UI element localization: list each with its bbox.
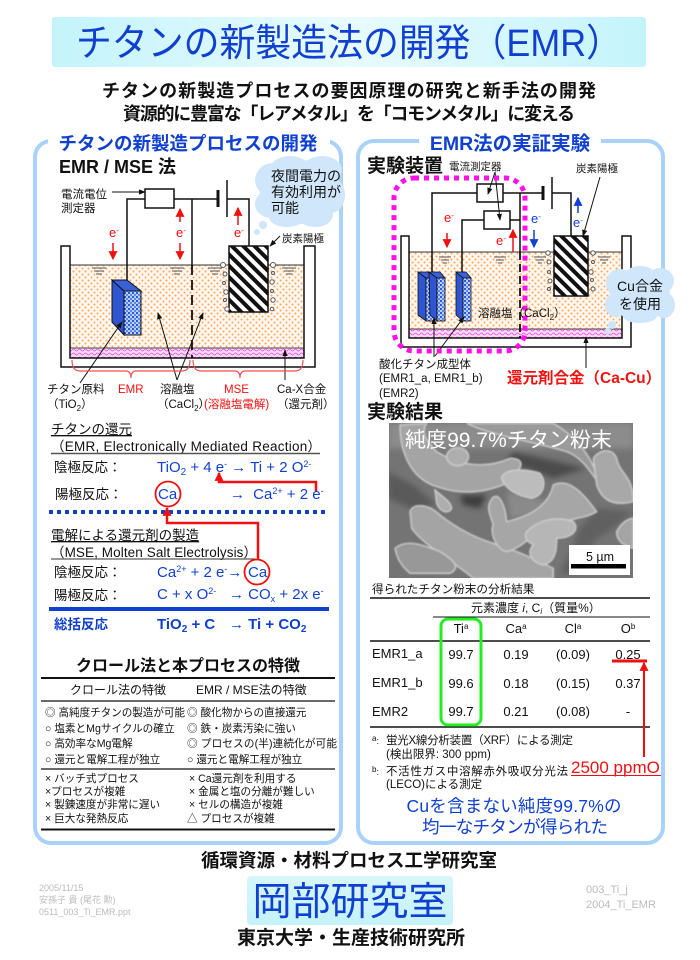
diagram labels: (溶融塩電解) — [204, 397, 269, 411]
table notes: : — [376, 736, 379, 746]
diagram labels: （TiO — [47, 399, 77, 411]
subtitle — [102, 81, 596, 124]
table notes — [372, 733, 574, 791]
table: titanium analysis: (0.09) — [556, 647, 590, 662]
table notes: b — [372, 765, 377, 774]
table: titanium analysis: 0.37 — [615, 676, 641, 691]
SEM title: 純度99.7%チタン粉末 — [405, 429, 612, 452]
table: titanium analysis — [370, 582, 650, 757]
TiO2 block — [112, 280, 141, 335]
text block: MSE reaction: - — [321, 586, 324, 596]
table: titanium analysis: 0.19 — [503, 647, 529, 662]
diagram: EMR experimental cell: - — [538, 212, 541, 221]
table: titanium analysis: （質量%） — [542, 600, 601, 615]
text block: MSE reaction: 2+ — [176, 564, 186, 574]
overall reaction: 2 — [301, 624, 307, 635]
table: comparison: × 金属と塩の分離が難しい — [189, 785, 315, 798]
diagram: EMR experimental cell: ） — [554, 307, 566, 320]
file info left: 0511_003_Ti_EMR.ppt — [39, 907, 131, 917]
callout: Cu alloy cloud: を使用 — [619, 296, 661, 312]
circle: Ca anode — [156, 482, 180, 506]
text block: EMR reaction: 陽極反応： — [55, 487, 122, 502]
diagram labels: MSE — [224, 384, 249, 396]
table: comparison: × バッチ式プロセス — [45, 772, 139, 785]
text block: MSE reaction: x — [271, 594, 276, 604]
file info left — [39, 883, 131, 917]
text block: MSE reaction: 陽極反応： — [54, 588, 122, 603]
overall reaction: → Ti + CO — [229, 616, 301, 633]
battery — [551, 177, 553, 209]
diagram labels: 2 — [77, 404, 82, 413]
text block: MSE reaction: + 2x e — [275, 586, 321, 603]
diagram labels — [47, 188, 334, 413]
table: comparison: × 巨大な発熱反応 — [45, 812, 129, 825]
diagram labels: チタン原料 — [47, 382, 105, 396]
table notes: a — [372, 734, 377, 743]
text block: MSE reaction — [51, 528, 324, 604]
electron labels: - — [116, 226, 119, 235]
table: comparison: ◎ 鉄・炭素汚染に強い — [187, 722, 296, 735]
table: comparison: ◎ 高純度チタンの製造が可能 — [45, 706, 185, 719]
text block: EMR reaction: 2+ — [272, 486, 283, 496]
text block: MSE reaction: → CO — [229, 586, 271, 603]
overall reaction: 2 — [182, 624, 188, 635]
braces — [72, 360, 303, 378]
table: comparison — [41, 678, 337, 830]
table: titanium analysis: EMR1_a — [372, 646, 423, 661]
text block: EMR reaction: → Ca — [230, 486, 272, 503]
file info left: 安孫子 貴 (尾花 勲) — [39, 894, 116, 905]
footer heading: 循環資源・材料プロセス工学研究室 — [201, 850, 497, 871]
text block: MSE reaction: （MSE, Molten Salt Electrolysis） — [51, 545, 257, 560]
diagram labels: EMR — [118, 384, 144, 396]
text block: EMR reaction: チタンの還元 — [51, 422, 132, 437]
carbon anode — [229, 246, 268, 312]
text block: EMR reaction: 陰極反応： — [54, 460, 122, 475]
text block: MSE reaction: 2- — [208, 586, 216, 596]
diagram: EMR experimental cell: e — [531, 211, 538, 226]
table: titanium analysis: (0.08) — [556, 704, 590, 719]
diagram labels: ） — [81, 398, 93, 411]
divider: dotted — [49, 510, 327, 514]
table: comparison: ○ 還元と電解工程が独立 — [187, 753, 303, 766]
table: titanium analysis: 元素濃度 i, C — [471, 601, 540, 615]
panel: right EMR demonstration — [358, 133, 663, 843]
table: titanium analysis: b — [631, 622, 636, 631]
table: titanium analysis: (0.15) — [556, 676, 590, 691]
table notes: (検出限界: 300 ppm) — [386, 747, 491, 761]
carbon anode — [554, 236, 588, 296]
table: comparison: EMR / MSE法の特徴 — [196, 682, 307, 697]
red arrow — [643, 663, 645, 757]
text block: EMR reaction — [51, 422, 324, 506]
text block: MSE reaction: + 2 e — [186, 564, 224, 581]
diagram labels: （還元剤） — [277, 398, 334, 411]
electron labels: e — [234, 225, 241, 240]
callout: Cu alloy cloud — [605, 266, 675, 334]
diagram labels: 2 — [194, 404, 199, 413]
scale bar: 5 µm — [586, 550, 614, 564]
electron labels: e — [444, 210, 451, 225]
overall reaction: 総括反応 — [54, 616, 108, 632]
table: comparison: ○ 塩素とMgサイクルの確立 — [45, 722, 175, 735]
conclusion: Cuを含まない純度99.7%の — [406, 796, 622, 816]
text block: MSE reaction: C + x O — [157, 586, 208, 603]
diagram labels: 電流測定器 — [449, 160, 502, 173]
table: comparison: × 製錬速度が非常に遅い — [45, 798, 160, 811]
subtitle: チタンの新製造プロセスの要因原理の研究と新手法の開発 — [102, 81, 596, 101]
text block: EMR reaction: Ca — [158, 486, 178, 503]
panel: left process development — [35, 133, 341, 843]
diagram: EMR experimental cell: 2 — [550, 313, 555, 322]
heading: results: 実験結果 — [367, 401, 443, 423]
right panel heading: EMR法の実証実験 — [430, 133, 591, 155]
diagram: EMR experimental cell: - — [580, 216, 583, 225]
scale bar — [569, 545, 630, 575]
table: comparison: クロール法の特徴 — [70, 682, 166, 697]
dashed emphasis box — [394, 178, 525, 351]
electron labels: e — [109, 225, 116, 240]
diagram labels: Ca-X合金 — [277, 383, 327, 396]
current meters — [477, 184, 503, 202]
text block: MSE reaction: → — [227, 564, 242, 581]
electron arrows — [446, 233, 448, 247]
arrow: electrons to cathode — [219, 473, 316, 491]
table notes: 蛍光X線分析装置（XRF）による測定 — [386, 733, 574, 747]
diagram labels: ） — [199, 398, 210, 411]
text block: EMR reaction: - — [321, 486, 324, 496]
overall reaction: + C — [187, 616, 215, 633]
table notes: (LECO)による測定 — [386, 777, 483, 791]
resistor box — [145, 189, 174, 208]
overall reaction: TiO — [157, 616, 182, 633]
diagram: EMR experimental cell: 炭素陽極 — [576, 162, 618, 175]
table: comparison: × セルの構造が複雑 — [189, 798, 283, 811]
EMR MSE heading: EMR / MSE 法 — [59, 157, 176, 177]
text block: EMR reaction: - — [224, 459, 227, 469]
diagram: EMR experimental cell: - — [503, 234, 506, 243]
table: titanium analysis: i — [540, 607, 542, 616]
divider: solid — [49, 607, 329, 611]
label pointers — [112, 191, 145, 193]
text block: MSE reaction: - — [224, 564, 227, 574]
circle: Ca cathode — [244, 560, 270, 584]
electron labels: e — [176, 225, 183, 240]
diagram labels: 溶融塩 — [160, 382, 195, 396]
text block: MSE reaction: Ca — [248, 564, 268, 581]
table: titanium analysis: a — [522, 622, 527, 631]
diagram: EMR experimental cell: (EMR2) — [379, 388, 419, 400]
callout: night power cloud: 夜間電力の — [271, 168, 341, 184]
table: titanium analysis: EMR2 — [372, 704, 408, 719]
conclusion — [406, 796, 622, 837]
battery — [226, 180, 228, 217]
table: titanium analysis: 0.21 — [503, 704, 529, 719]
callout: night power cloud — [254, 156, 345, 235]
diagram: EMR experimental cell: e — [496, 233, 503, 248]
table: titanium analysis: 99.7 — [448, 704, 474, 719]
table: titanium analysis: O — [621, 621, 631, 636]
label pointers — [488, 172, 495, 194]
text block: EMR reaction: + 2 e — [283, 486, 321, 503]
callout: Cu alloy cloud: Cu合金 — [617, 278, 663, 294]
gas bubbles — [220, 262, 276, 311]
footer org: 東京大学・生産技術研究所 — [237, 926, 465, 949]
reductant label: 還元剤合金（Ca-Cu） — [507, 368, 661, 387]
table: titanium analysis: a — [464, 622, 469, 631]
text block: MSE reaction: 電解による還元剤の製造 — [51, 528, 200, 543]
diagram labels: 電流電位 — [61, 188, 107, 201]
diagram: EMR MSE cell — [47, 180, 334, 413]
text block: MSE reaction: Ca — [157, 564, 176, 581]
text block: EMR reaction: + 4 e — [186, 459, 224, 476]
SEM image — [388, 423, 633, 578]
heading: apparatus: 実験装置 — [367, 155, 443, 177]
table: comparison: ◎ 酸化物からの直接還元 — [187, 706, 307, 719]
table: titanium analysis: Ti — [454, 621, 464, 636]
diagram labels: 炭素陽極 — [282, 232, 324, 245]
text block: EMR reaction: 2 — [181, 467, 187, 478]
file info left: 2005/11/15 — [39, 883, 83, 893]
green highlight — [441, 619, 481, 725]
lab name: 岡部研究室 — [252, 881, 448, 924]
table: titanium analysis: Ca — [505, 621, 522, 636]
text block: EMR reaction: → Ti + 2 O — [227, 459, 303, 476]
callout: night power cloud: 有効利用が — [271, 184, 341, 200]
diagram: EMR experimental cell: e — [573, 215, 580, 230]
electron labels: - — [241, 226, 244, 235]
red underline — [612, 660, 647, 662]
table: titanium analysis: a — [577, 622, 582, 631]
heading: comparison: クロール法と本プロセスの特徴 — [76, 656, 300, 675]
table notes: 不活性ガス中溶解赤外吸収分光法 — [386, 764, 568, 778]
file info right: 003_Ti_j — [586, 884, 628, 896]
text block: MSE reaction: 陰極反応： — [54, 565, 122, 580]
table: titanium analysis: 0.18 — [503, 676, 529, 691]
left panel heading: チタンの新製造プロセスの開発 — [58, 133, 318, 154]
table: titanium analysis: 99.6 — [448, 676, 474, 691]
table: titanium analysis: 99.7 — [448, 647, 474, 662]
file info right — [586, 884, 656, 911]
arrow: Ca to anode — [167, 508, 258, 560]
table notes: : — [376, 767, 379, 777]
diagram labels: （CaCl — [157, 399, 194, 411]
electron labels — [109, 225, 244, 240]
table: comparison: ×プロセスが複雑 — [45, 785, 126, 798]
title: チタンの新製造法の開発（EMR） — [76, 23, 622, 65]
diagram: EMR experimental cell: (EMR1_a, EMR1_b) — [379, 373, 483, 385]
table: titanium analysis: 得られたチタン粉末の分析結果 — [372, 582, 535, 596]
oxygen callout: 2500 ppmO — [571, 758, 660, 777]
diagram: EMR experimental cell: 酸化チタン成型体 — [379, 357, 471, 371]
electron arrows — [113, 208, 238, 259]
table: titanium analysis: EMR1_b — [372, 675, 423, 690]
electron labels: - — [183, 226, 186, 235]
diagram labels: 測定器 — [61, 201, 96, 215]
subtitle: 資源的に豊富な「レアメタル」を「コモンメタル」に変える — [123, 104, 575, 124]
electron labels: - — [451, 211, 454, 220]
conclusion: 均一なチタンが得られた — [422, 817, 608, 837]
table: comparison: ○ 高効率なMg電解 — [45, 737, 133, 750]
text block: EMR reaction: （EMR, Electronically Mediated Reaction） — [51, 439, 321, 454]
table: comparison: △ プロセスが複雑 — [187, 812, 275, 825]
oxide pellets — [418, 272, 471, 321]
table: comparison: ○ 還元と電解工程が独立 — [45, 753, 161, 766]
diagram: EMR experimental cell: 溶融塩（CaCl — [478, 308, 550, 320]
diagram: EMR experimental cell — [379, 160, 661, 400]
table: titanium analysis: Cl — [565, 621, 577, 636]
text block: EMR reaction: 2- — [303, 459, 311, 469]
callout: night power cloud: 可能 — [271, 200, 299, 216]
table: titanium analysis: - — [626, 704, 630, 719]
overall reaction — [54, 616, 307, 635]
table: comparison: ◎ プロセスの(半)連続化が可能 — [187, 737, 337, 750]
text block: EMR reaction: TiO — [157, 459, 181, 476]
file info right: 2004_Ti_EMR — [586, 899, 656, 911]
table: comparison: × Ca還元剤を利用する — [189, 772, 296, 785]
table: titanium analysis: 0.25 — [615, 647, 641, 662]
gas bubbles — [546, 251, 595, 291]
